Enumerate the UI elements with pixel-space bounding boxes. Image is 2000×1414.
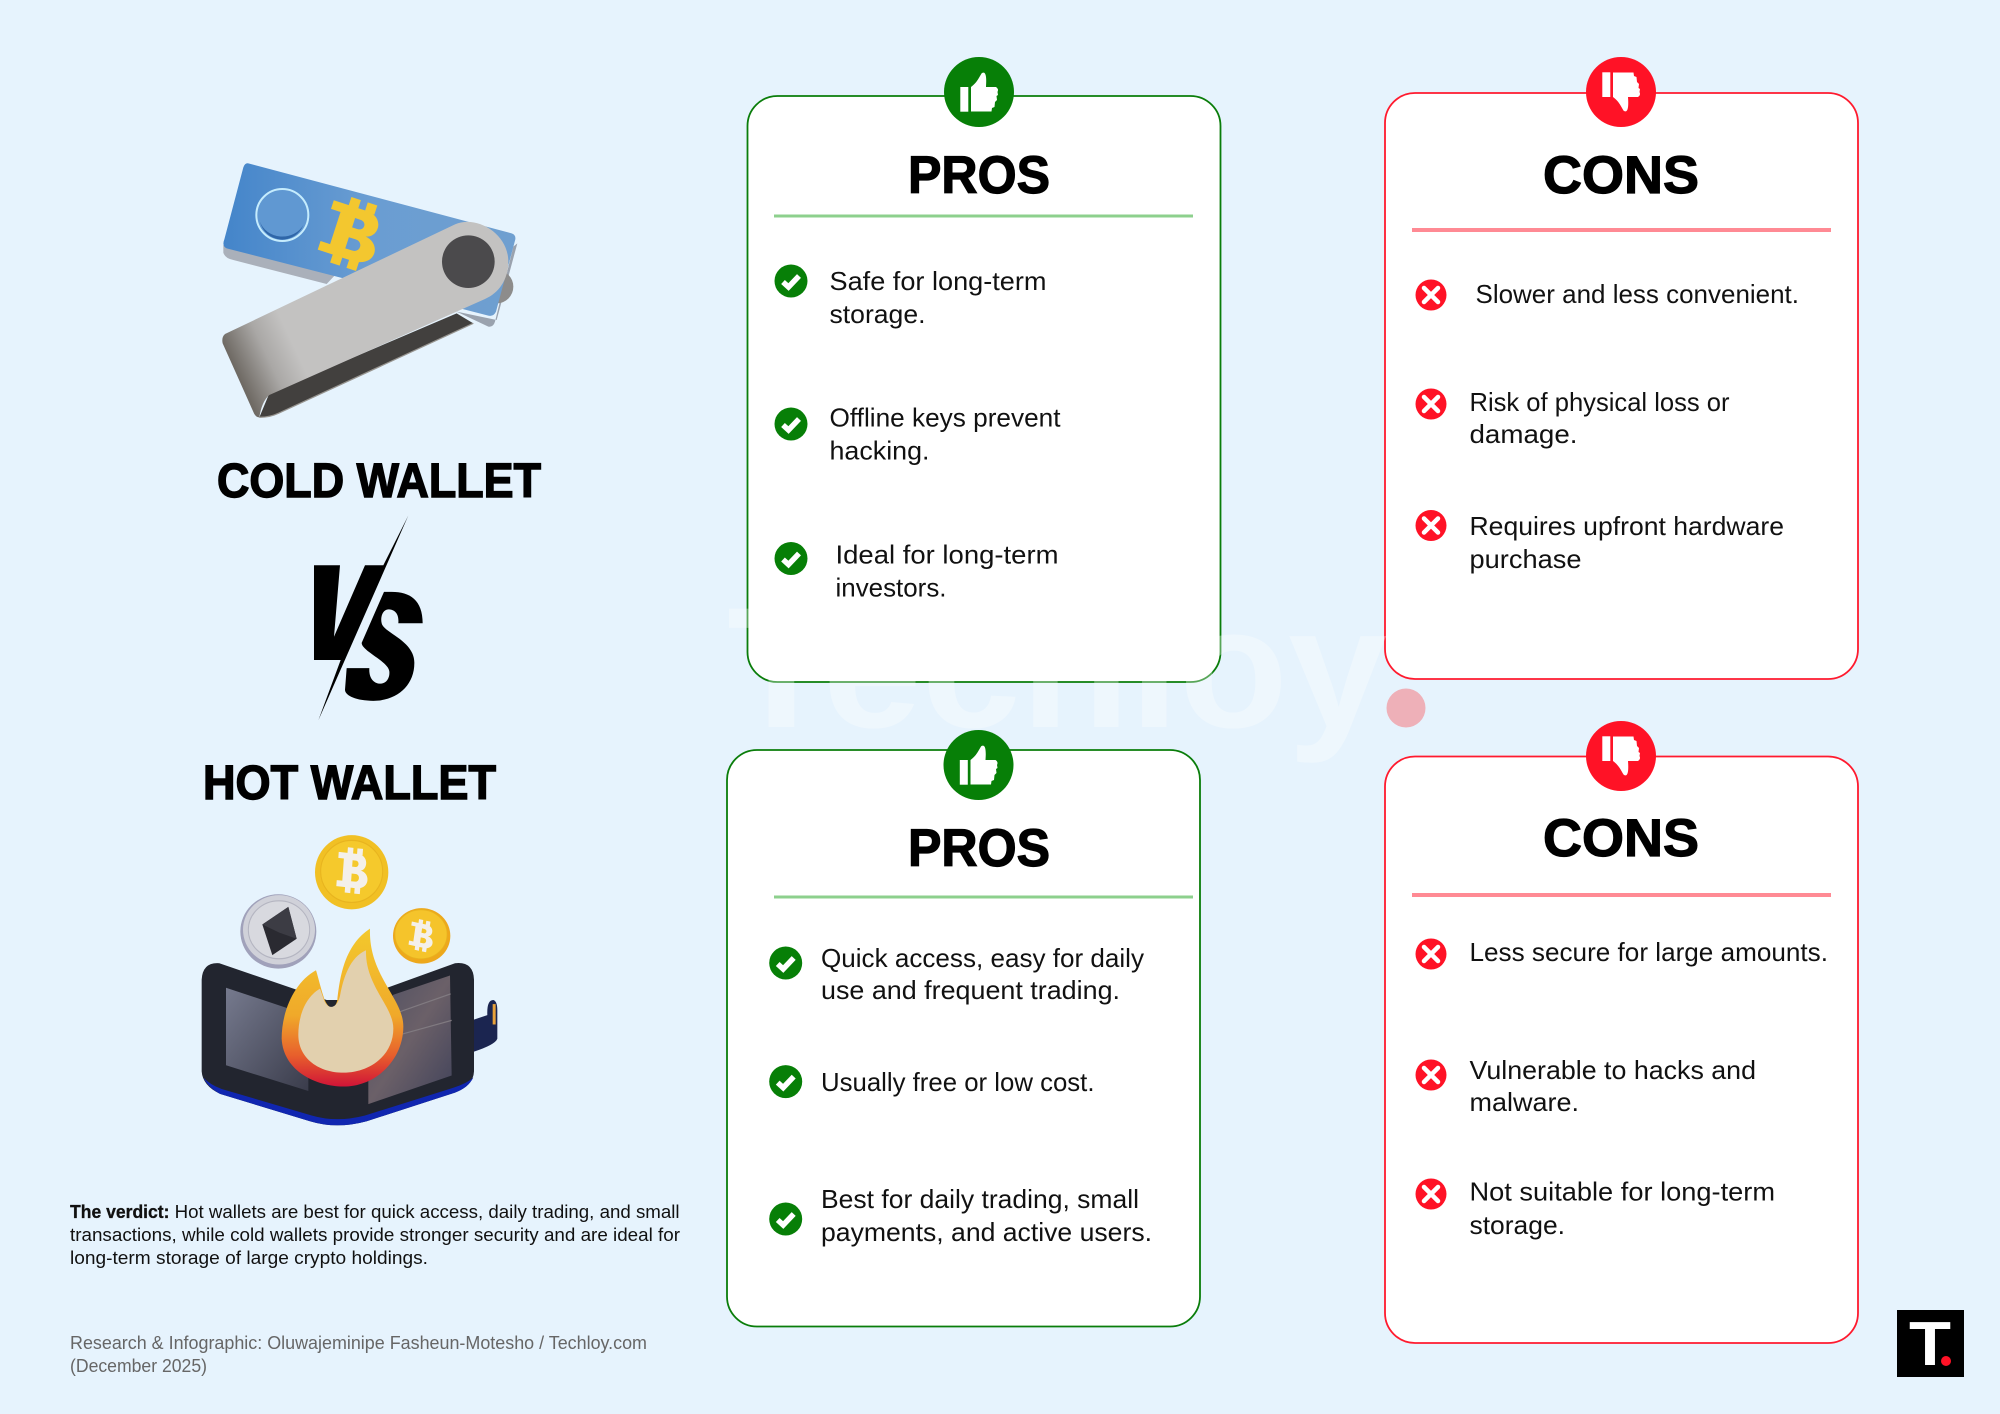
item: not long-term: Not suitable for long-term xyxy=(1470,1176,1775,1206)
logo: Techloy T xyxy=(1897,1310,1964,1379)
item: not long-term xyxy=(1416,1176,1775,1240)
illustration: cold wallet hardware device xyxy=(222,163,517,417)
verdict paragraph: Hot wallets are best for quick access, daily trading, and small xyxy=(175,1201,680,1222)
wallet left pocket xyxy=(226,988,308,1091)
panel: hot wallet pros xyxy=(727,730,1200,1326)
item: low cost: Usually free or low cost. xyxy=(821,1067,1094,1097)
item: upfront purchase: Requires upfront hardware xyxy=(1470,511,1784,541)
panel: cold wallet pros xyxy=(748,57,1220,682)
heading: pros: PROS xyxy=(908,146,1050,205)
wallet clasp xyxy=(472,1000,497,1052)
item: safe for long-term storage: Safe for long-term xyxy=(830,266,1046,296)
heading: cons: CONS xyxy=(1543,146,1699,205)
item: offline keys: hacking. xyxy=(830,436,930,466)
item: upfront purchase: purchase xyxy=(1470,544,1582,574)
heading: pros: PROS xyxy=(908,819,1050,878)
item: safe for long-term storage xyxy=(774,264,1046,329)
heading: cold wallet: COLD WALLET xyxy=(217,455,541,508)
panel: cold wallet cons xyxy=(1385,57,1858,679)
coin: ethereum xyxy=(240,894,316,969)
flame inner xyxy=(298,950,393,1073)
panel: hot wallet cons xyxy=(1385,721,1858,1343)
coin: bitcoin small xyxy=(393,908,450,964)
swivel underside xyxy=(259,313,473,417)
item: ideal for investors: Ideal for long-term xyxy=(836,540,1058,570)
item: less secure: Less secure for large amounts. xyxy=(1470,937,1828,967)
bitcoin mark xyxy=(315,192,389,275)
verdict paragraph: transactions, while cold wallets provide stronger security and are ideal for xyxy=(70,1224,680,1245)
item: vulnerable to hacks: malware. xyxy=(1470,1087,1579,1117)
icon: thumbs up xyxy=(944,57,1014,127)
item: daily trading: Best for daily trading, small xyxy=(821,1184,1139,1214)
verdict paragraph: The verdict: xyxy=(70,1201,170,1222)
item: not long-term: storage. xyxy=(1470,1210,1565,1240)
heading: hot wallet: HOT WALLET xyxy=(203,757,496,810)
item: ideal for investors xyxy=(774,540,1058,602)
item: daily trading: payments, and active users. xyxy=(821,1217,1152,1247)
icon: thumbs down xyxy=(1586,57,1656,127)
wallet body xyxy=(202,963,474,1125)
item: quick access: use and frequent trading. xyxy=(821,975,1120,1005)
verdict paragraph: long-term storage of large crypto holdings. xyxy=(70,1247,428,1268)
button ring xyxy=(256,189,308,241)
verdict paragraph xyxy=(70,1201,680,1268)
heading: cons: CONS xyxy=(1543,809,1699,868)
icon: thumbs down xyxy=(1586,721,1656,791)
item: ideal for investors: investors. xyxy=(836,572,946,602)
item: risk of loss: Risk of physical loss or xyxy=(1470,387,1730,417)
credit line: Research & Infographic: Oluwajeminipe Fasheun-Motesho / Techloy.com xyxy=(70,1332,647,1353)
credit line: (December 2025) xyxy=(70,1355,207,1376)
item: quick access: Quick access, easy for daily xyxy=(821,943,1144,973)
item: quick access xyxy=(769,943,1144,1005)
item: vulnerable to hacks xyxy=(1416,1055,1756,1117)
logo: Techloy T: T xyxy=(1909,1310,1951,1379)
wallet right pockets xyxy=(368,976,452,1104)
item: vulnerable to hacks: Vulnerable to hacks and xyxy=(1470,1055,1756,1085)
icon: versus mark xyxy=(314,516,423,720)
item: offline keys: Offline keys prevent xyxy=(830,402,1061,432)
flame outer xyxy=(282,929,403,1087)
item: safe for long-term storage: storage. xyxy=(830,299,926,329)
item: daily trading xyxy=(769,1184,1152,1247)
item: risk of loss xyxy=(1416,387,1730,449)
swivel metal cover xyxy=(222,222,508,417)
item: slower: Slower and less convenient. xyxy=(1476,279,1799,309)
item: offline keys xyxy=(774,402,1061,466)
icon: thumbs up xyxy=(944,730,1014,800)
swivel pin xyxy=(442,235,495,288)
illustration: hot wallet with coins and flame xyxy=(202,835,497,1125)
item: upfront purchase xyxy=(1416,510,1784,574)
watermark: Techloy: Techloy xyxy=(727,572,1387,764)
coin: bitcoin large xyxy=(315,835,388,909)
item: risk of loss: damage. xyxy=(1470,419,1578,449)
credit line xyxy=(70,1332,647,1376)
